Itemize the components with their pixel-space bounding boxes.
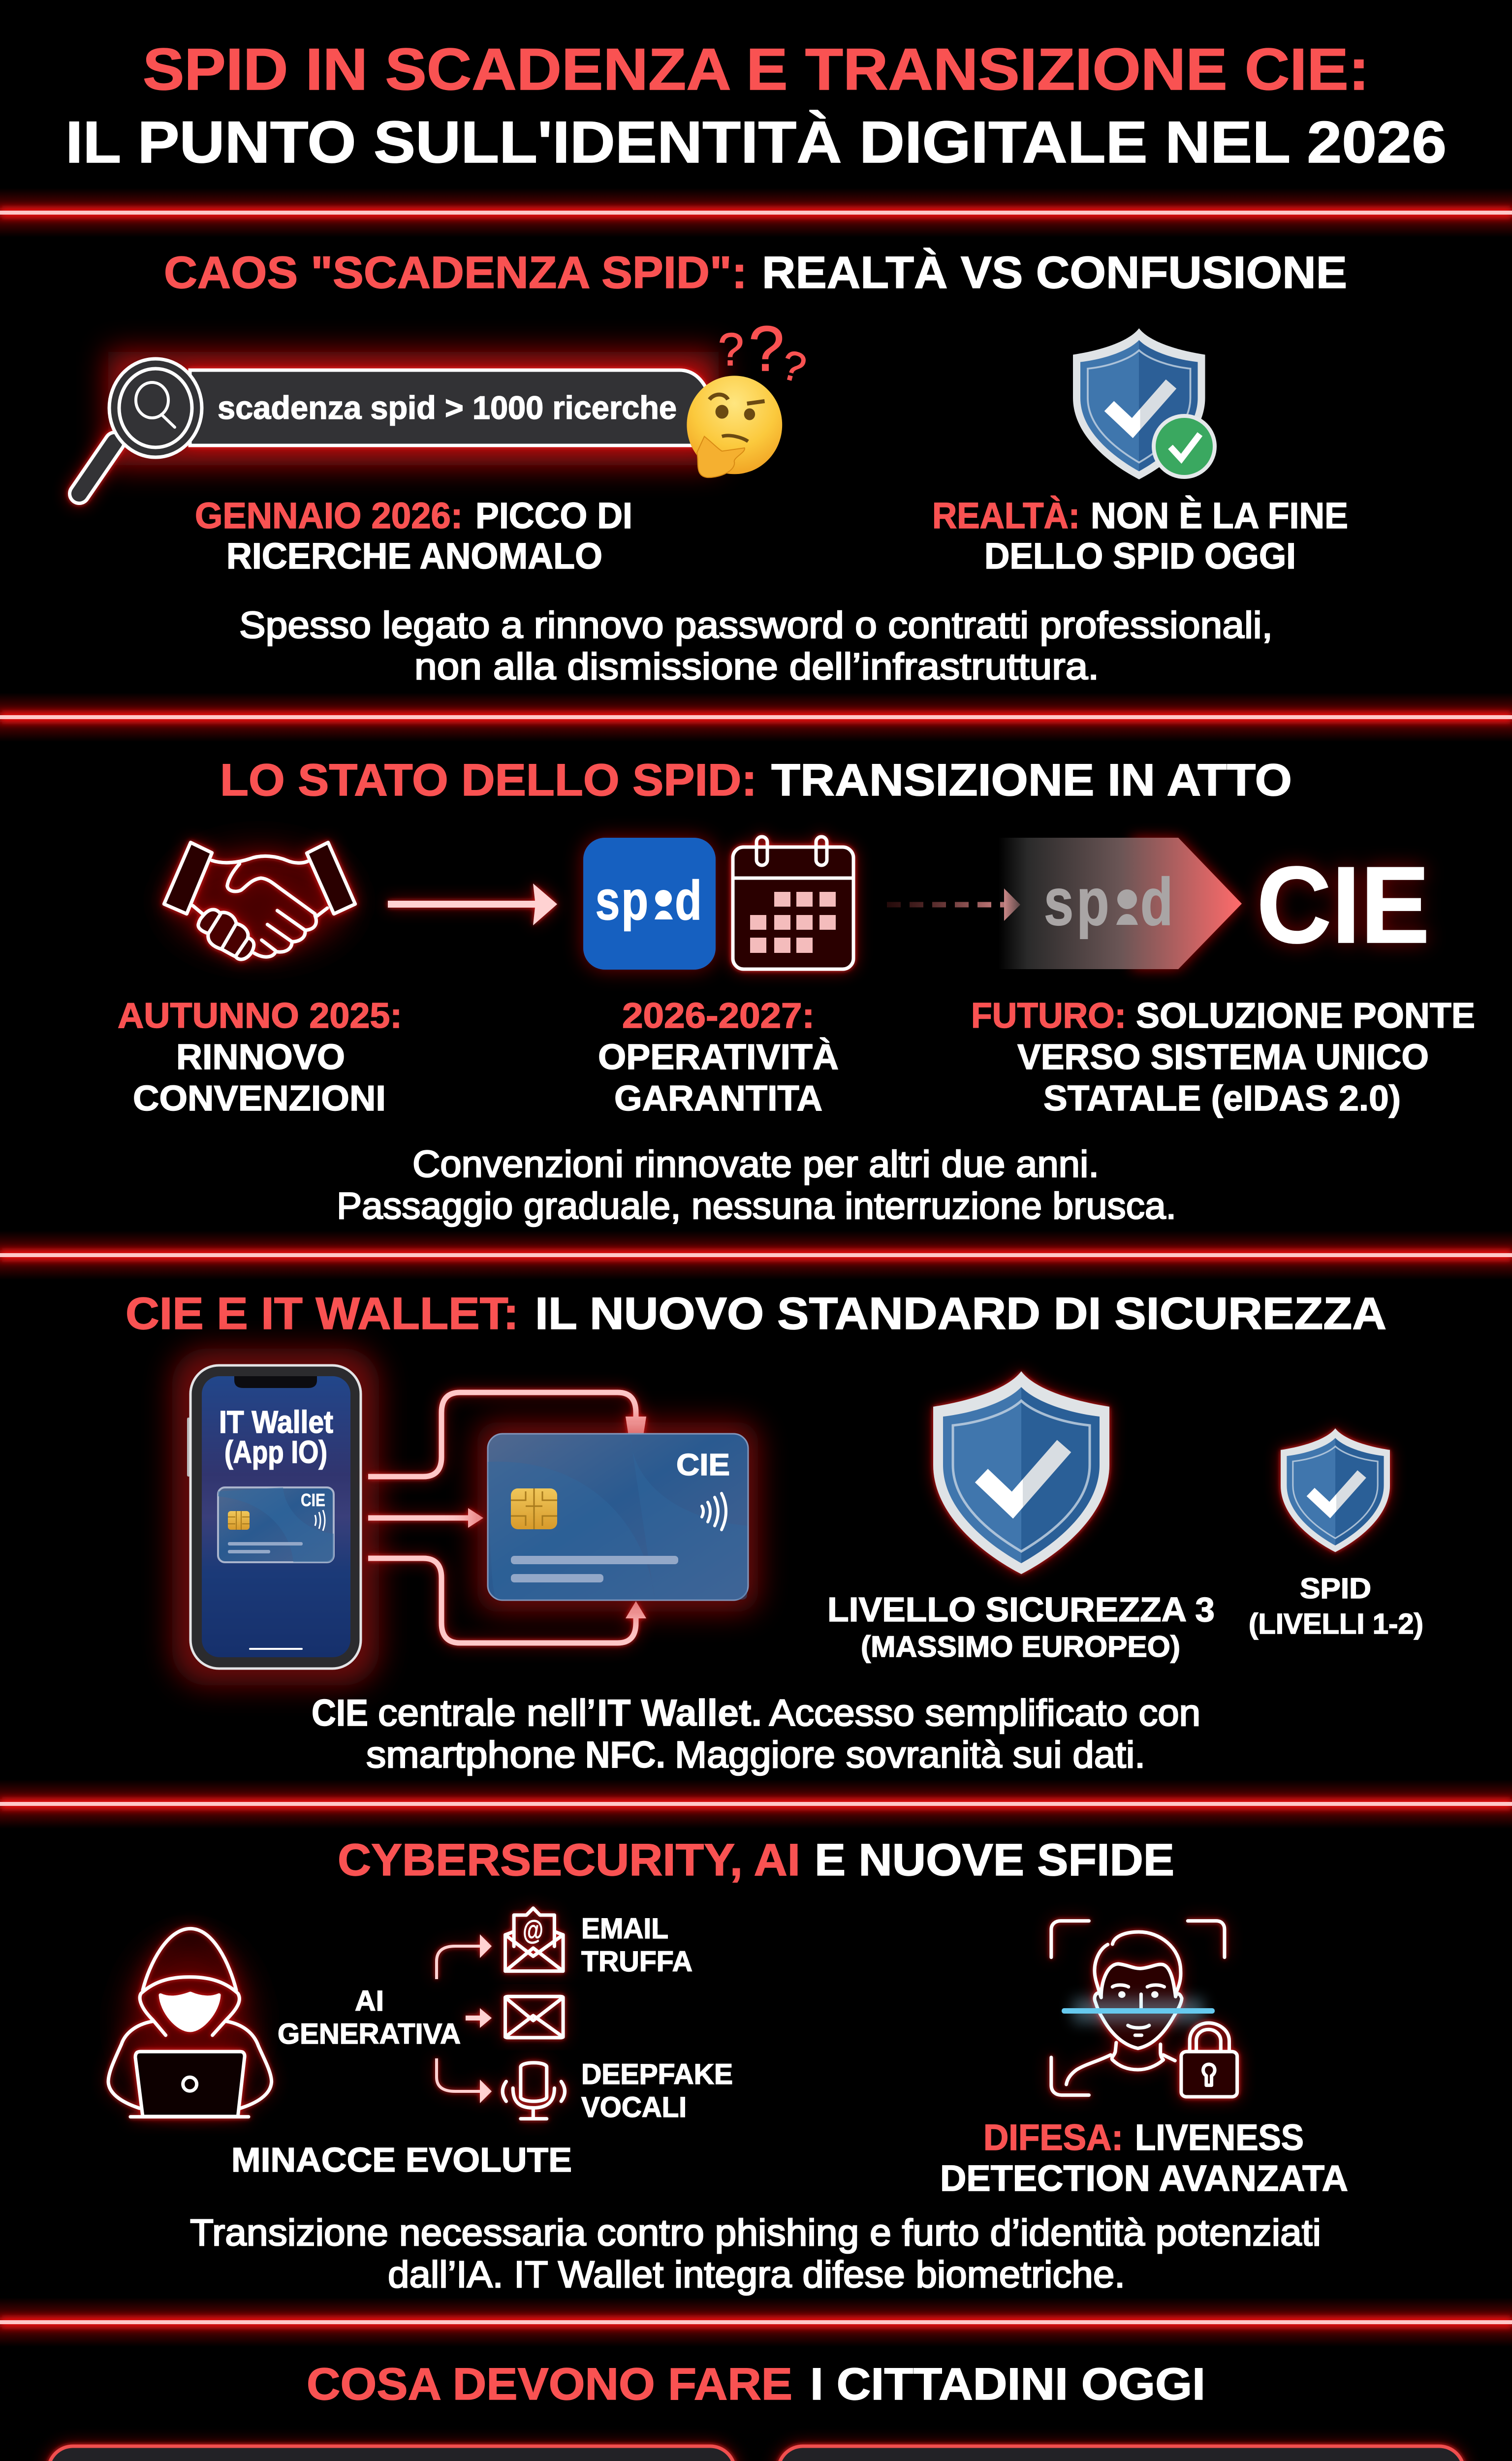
icon: faded spid chevron	[998, 838, 1242, 969]
panel: cybersecurity	[108, 1835, 1348, 2296]
label: threats: DEEPFAKE	[581, 2058, 733, 2090]
icon: question marks: ?	[777, 341, 811, 392]
icon: calendar	[733, 837, 853, 969]
icon: cie text logo: CIE	[1257, 844, 1430, 966]
label: threats	[581, 1913, 733, 2123]
label: threats: EMAIL	[581, 1913, 668, 1945]
text block: transizione necessaria: dall’IA. IT Wallet integra difese biometriche.	[388, 2254, 1125, 2296]
arrows: phone to card	[368, 1392, 646, 1643]
icon: smartphone with it wallet: IT Wallet	[219, 1404, 333, 1440]
text block: cie centrale	[312, 1692, 1200, 1776]
label: ai generativa: GENERATIVA	[278, 2018, 461, 2050]
heading: cybersecurity	[338, 1835, 1174, 1885]
text block: convenzioni rinnovate: Convenzioni rinnovate per altri due anni.	[412, 1143, 1099, 1185]
heading: caos scadenza	[164, 248, 1347, 298]
label: futuro: STATALE (eIDAS 2.0)	[1043, 1079, 1401, 1118]
icon: large shield	[933, 1371, 1109, 1574]
label: gennaio 2026: GENNAIO 2026:	[195, 495, 463, 536]
title: IL PUNTO SULL'IDENTITÀ DIGITALE NEL 2026	[65, 109, 1447, 175]
text block: transizione necessaria	[190, 2212, 1321, 2296]
heading: stato dello spid: LO STATO DELLO SPID:	[220, 755, 757, 805]
label: autunno 2025	[118, 996, 402, 1118]
icon: spid logo tile	[583, 838, 716, 970]
label: 2026-2027: GARANTITA	[614, 1079, 822, 1118]
icon: search bar with magnifier: scadenza spid > 1000 ricerche	[218, 389, 677, 426]
icon: faded spid chevron: spid	[1044, 865, 1173, 940]
panel: cosa devono fare	[48, 2359, 1464, 2461]
label: livello sicurezza 3: (MASSIMO EUROPEO)	[861, 1630, 1180, 1663]
icon: handshake	[164, 843, 355, 959]
icon: spid logo tile: spid	[596, 870, 702, 931]
heading: caos scadenza: CAOS "SCADENZA SPID":	[164, 248, 747, 298]
icon: hacker with laptop	[108, 1928, 272, 2117]
label: 2026-2027: 2026-2027:	[622, 996, 815, 1036]
label: gennaio 2026: RICERCHE ANOMALO	[226, 536, 602, 576]
panel: cie e it wallet	[126, 1289, 1423, 1776]
text block: cie centrale: smartphone	[366, 1734, 576, 1776]
label: futuro	[971, 996, 1475, 1118]
label: autunno 2025: CONVENZIONI	[133, 1079, 386, 1118]
icon: cie card	[477, 1422, 758, 1611]
label: gennaio 2026: PICCO DI	[475, 495, 632, 536]
label: futuro: SOLUZIONE PONTE	[1136, 996, 1475, 1036]
label: threats: TRUFFA	[581, 1946, 693, 1978]
icon: cie card: CIE	[676, 1448, 730, 1482]
heading: cybersecurity: CYBERSECURITY, AI	[338, 1835, 800, 1885]
heading: cie e it wallet	[126, 1289, 1386, 1339]
label: 2026-2027: OPERATIVITÀ	[598, 1038, 839, 1077]
icon: smartphone with it wallet: CIE	[301, 1490, 325, 1510]
text block: cie centrale: NFC.	[585, 1734, 665, 1776]
arrow: dashed to cie	[887, 888, 1020, 921]
panel: consiglio fondamentale	[778, 2446, 1464, 2461]
panel: chi ha spid	[48, 2446, 735, 2461]
label: threats: VOCALI	[581, 2091, 687, 2123]
text block: spesso legato: Spesso legato a rinnovo password o contratti professionali,	[239, 604, 1273, 646]
text block: convenzioni rinnovate	[337, 1143, 1176, 1227]
label: realta: DELLO SPID OGGI	[984, 536, 1296, 576]
label: spid livelli: SPID	[1300, 1573, 1371, 1605]
icon: question marks: ?	[749, 313, 784, 384]
text block: cie centrale: Maggiore sovranità sui dati.	[675, 1734, 1145, 1776]
text block: cie centrale: Accesso semplificato con	[769, 1692, 1200, 1734]
text block: cie centrale: centrale nell’	[378, 1692, 596, 1734]
label: difesa	[940, 2117, 1348, 2199]
icon: question marks	[718, 313, 811, 392]
icon: email with at sign: @	[523, 1914, 543, 1945]
text block: spesso legato: non alla dismissione dell’infrastruttura.	[414, 646, 1099, 688]
panel: stato dello spid	[118, 755, 1475, 1227]
heading: cie e it wallet: IL NUOVO STANDARD DI SICUREZZA	[535, 1289, 1386, 1339]
label: ai generativa: AI	[355, 1985, 384, 2017]
heading: cosa devono fare	[307, 2359, 1205, 2409]
heading: caos scadenza: REALTÀ VS CONFUSIONE	[762, 248, 1347, 298]
icon: smartphone with it wallet: (App IO)	[224, 1434, 327, 1470]
arrows: ai to threats	[437, 1934, 492, 2103]
label: autunno 2025: AUTUNNO 2025:	[118, 996, 402, 1036]
label: spid livelli: (LIVELLI 1-2)	[1249, 1608, 1423, 1640]
panel: caos scadenza spid	[79, 248, 1348, 688]
label: realta	[932, 495, 1348, 576]
icon: thinking emoji	[687, 376, 782, 477]
heading: cosa devono fare: COSA DEVONO FARE	[307, 2359, 792, 2409]
label: livello sicurezza 3	[827, 1590, 1215, 1663]
icon: email with at sign	[505, 1908, 563, 1971]
label: ai generativa	[278, 1985, 461, 2050]
text block: convenzioni rinnovate: Passaggio graduale, nessuna interruzione brusca.	[337, 1185, 1176, 1227]
label: futuro: VERSO SISTEMA UNICO	[1017, 1038, 1429, 1077]
title	[65, 36, 1447, 175]
label: autunno 2025: RINNOVO	[176, 1038, 345, 1077]
label: realta: NON È LA FINE	[1091, 495, 1348, 536]
icon: microphone	[503, 2063, 565, 2119]
icon: envelope	[505, 1996, 563, 2038]
heading: cie e it wallet: CIE E IT WALLET:	[126, 1289, 519, 1339]
heading: cosa devono fare: I CITTADINI OGGI	[810, 2359, 1205, 2409]
icon: search bar with magnifier	[79, 352, 719, 494]
icon: face scan with lock	[1051, 1921, 1237, 2097]
text block: spesso legato	[239, 604, 1273, 688]
text block: transizione necessaria: Transizione necessaria contro phishing e furto d’identità potenziati	[190, 2212, 1321, 2254]
label: difesa: DETECTION AVANZATA	[940, 2158, 1348, 2199]
icon: question marks: ?	[718, 323, 744, 375]
icon: small shield	[1281, 1428, 1390, 1552]
label: difesa: DIFESA:	[983, 2117, 1123, 2158]
label: difesa: LIVENESS	[1135, 2117, 1304, 2158]
title: SPID IN SCADENZA E TRANSIZIONE CIE:	[143, 36, 1369, 102]
label: 2026-2027	[598, 996, 839, 1118]
label: realta: REALTÀ:	[932, 495, 1080, 536]
text block: cie centrale: IT Wallet.	[597, 1692, 762, 1734]
icon: shield with green check	[1073, 328, 1215, 479]
arrow: to spid	[388, 883, 557, 925]
label: minacce evolute: MINACCE EVOLUTE	[231, 2141, 572, 2179]
label: livello sicurezza 3: LIVELLO SICUREZZA 3	[827, 1590, 1215, 1629]
heading: stato dello spid	[220, 755, 1292, 805]
label: spid livelli	[1249, 1573, 1423, 1640]
label: gennaio 2026	[195, 495, 632, 576]
label: futuro: FUTURO:	[971, 996, 1126, 1036]
icon: smartphone with it wallet	[172, 1349, 379, 1685]
heading: cybersecurity: E NUOVE SFIDE	[815, 1835, 1174, 1885]
text block: cie centrale: CIE	[312, 1692, 368, 1734]
heading: stato dello spid: TRANSIZIONE IN ATTO	[771, 755, 1292, 805]
